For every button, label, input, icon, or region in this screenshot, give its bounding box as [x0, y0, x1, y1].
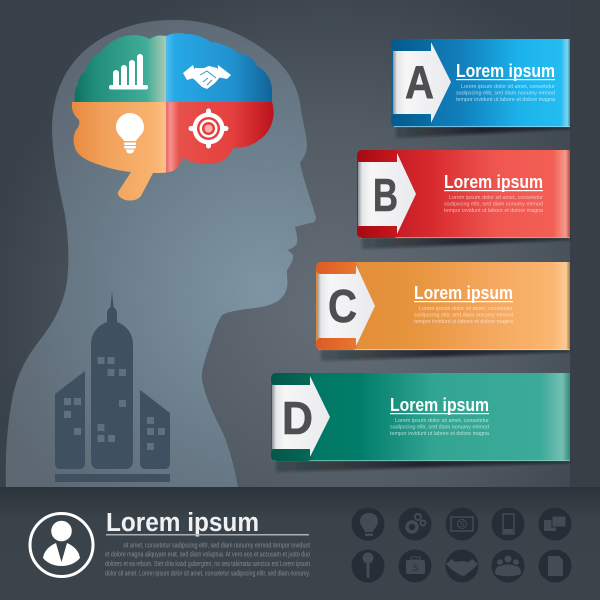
ribbon A body text: tempor invidunt ut labore et dolore magna [456, 97, 556, 103]
ribbon C shadow [321, 348, 570, 361]
ribbon C body text: Lorem ipsum dolor sit amet, consetetur [419, 306, 513, 312]
ribbon C heading underline [414, 301, 513, 302]
ribbon B heading: Lorem ipsum [444, 172, 543, 192]
ribbon C bottom edge [319, 348, 570, 351]
ribbon B [357, 150, 570, 249]
icon: dark bulb [352, 508, 384, 540]
icon: dark key [352, 550, 384, 582]
brain colour quadrants [70, 30, 276, 204]
ribbon B arrow [358, 153, 416, 234]
ribbon D [271, 373, 570, 472]
ribbon A [391, 39, 570, 138]
ribbon C body text: sadipscing elitr, sed diam nonumy eirmod [414, 312, 513, 318]
icon: dark people group [492, 550, 524, 582]
footer heading underline [106, 534, 309, 536]
footer body text: et dolore magna aliquyam erat, sed diam voluptua. At vero eos et accusam et justo duo [105, 552, 310, 558]
bottom dark strip [0, 487, 600, 600]
icon: dark banknote [446, 508, 478, 540]
ribbon B heading underline [444, 190, 543, 191]
ribbon B body [357, 150, 570, 238]
ribbon D heading underline [390, 413, 489, 414]
icon: dark gears [398, 508, 432, 540]
icon grid [352, 508, 572, 582]
ribbon A arrow [393, 42, 451, 123]
ribbon B body text: tempor invidunt ut labore et dolore magna [444, 208, 544, 214]
icon: dark briefcase [398, 550, 432, 582]
footer body text: dolor sit amet. Lorem ipsum dolor sit amet, consetetur sadipscing elitr, sed diam nonumy. [105, 570, 310, 578]
ribbon D bottom edge [274, 459, 570, 462]
icon: light bulb [116, 113, 144, 154]
ribbon B bottom edge [360, 236, 570, 239]
footer body text [105, 542, 310, 578]
footer body text: sit amet, consetetur sadipscing elitr, sed diam nonumy eirmod tempor invidunt [123, 542, 310, 550]
ribbon A body text: sadipscing elitr, sed diam nonumy eirmod [456, 90, 555, 96]
icon: businessman badge [30, 514, 93, 576]
ribbon D tabs [271, 373, 313, 461]
ribbon A body [391, 39, 570, 127]
icon: dark banknote: S [459, 520, 465, 529]
icon: dark document [538, 550, 572, 582]
footer body text: dolores et ea rebum. Stet clita kasd gubergren, no sea takimata sanctus est Lorem ipsum [105, 561, 310, 568]
ribbon B body text [444, 195, 544, 214]
center tower [91, 291, 133, 469]
ribbon A shadow [396, 125, 570, 138]
city skyline icon [55, 291, 170, 482]
city base bar [55, 474, 170, 482]
icon: dark briefcase: S [412, 563, 419, 573]
ribbon C body text [414, 306, 514, 325]
icon: handshake [183, 65, 231, 89]
ribbon A heading underline [456, 79, 555, 80]
icon: dark mobile phone [492, 508, 524, 540]
ribbon D body text: sadipscing elitr, sed diam nonumy eirmod [390, 424, 489, 430]
ribbon C letter: C [328, 280, 357, 332]
icon: target [191, 111, 226, 146]
ribbon A body text [456, 84, 556, 103]
ribbon C heading: Lorem ipsum [414, 283, 513, 303]
icon: dark handshake [446, 550, 478, 582]
ribbon B tabs [357, 150, 399, 238]
ribbon A tabs [391, 39, 433, 126]
footer heading: Lorem ipsum [106, 509, 259, 537]
head silhouette [6, 20, 316, 487]
ribbon B body text: Lorem ipsum dolor sit amet, consetetur [449, 195, 543, 201]
ribbon D letter: D [282, 392, 313, 444]
ribbon A letter: A [405, 56, 434, 108]
ribbon A heading: Lorem ipsum [456, 61, 555, 81]
ribbon C arrow [317, 265, 375, 346]
icon: bar chart [109, 54, 148, 90]
icon: dark speech bubbles [538, 508, 572, 540]
ribbon D body [271, 373, 570, 461]
ribbon A body text: Lorem ipsum dolor sit amet, consetetur [461, 84, 555, 90]
ribbon B letter: B [373, 169, 398, 221]
ribbon A bottom edge [394, 125, 570, 128]
brain graphic [70, 30, 276, 204]
ribbon C body [316, 262, 570, 350]
ribbon D body text [390, 418, 490, 437]
ribbon D arrow [272, 376, 330, 457]
ribbon D body text: tempor invidunt ut labore et dolore magna [390, 431, 490, 437]
ribbon C body text: tempor invidunt ut labore et dolore magna [414, 319, 514, 325]
left building [55, 371, 85, 469]
ribbon B body text: sadipscing elitr, sed diam nonumy eirmod [444, 202, 543, 208]
building windows [64, 357, 165, 450]
ribbon C tabs [316, 262, 358, 350]
ribbon D body text: Lorem ipsum dolor sit amet, consetetur [395, 418, 489, 424]
ribbon D heading: Lorem ipsum [390, 395, 489, 415]
ribbon B shadow [362, 236, 570, 249]
right building [140, 390, 170, 469]
ribbon D shadow [276, 459, 570, 472]
ribbon C [316, 262, 570, 361]
right dark strip [570, 0, 600, 487]
